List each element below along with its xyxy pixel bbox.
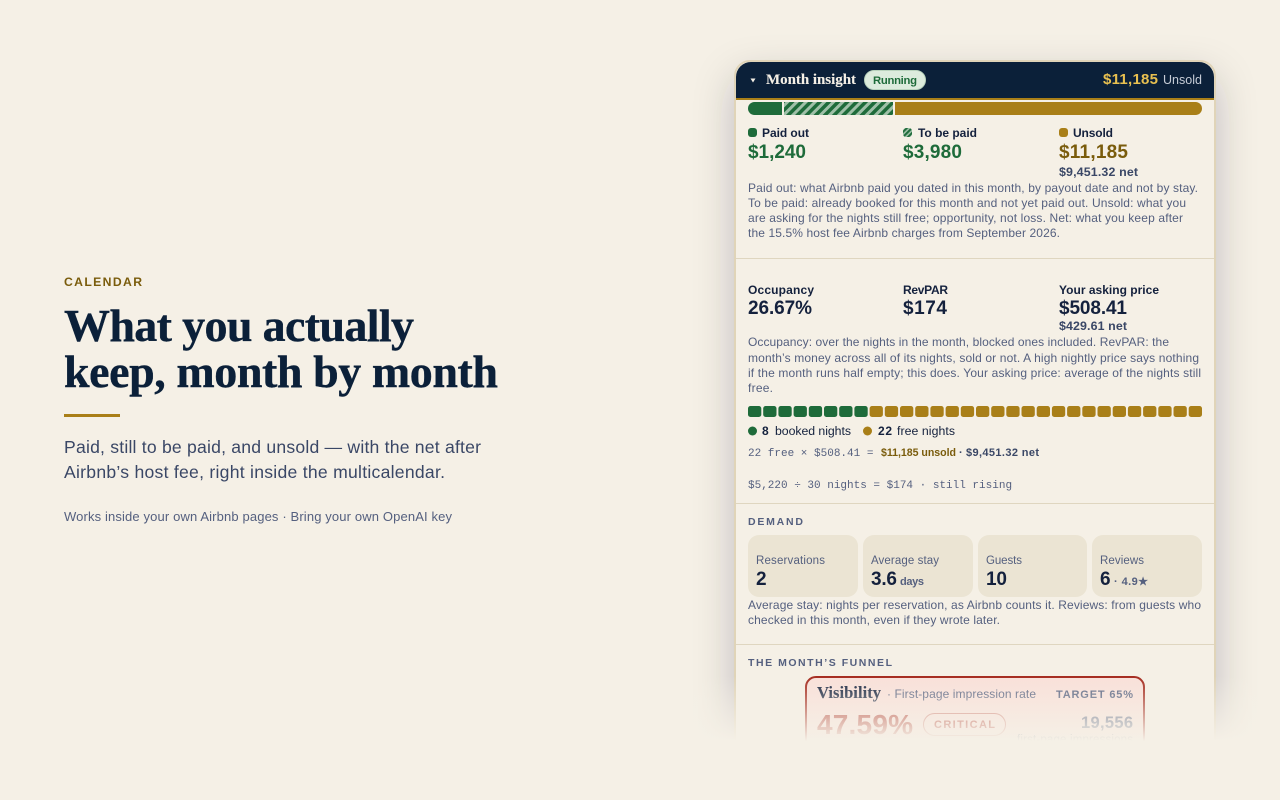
demand card: average stay: 3.6 bbox=[871, 569, 897, 590]
formula: unsold calculation: 22 free × $508.41 = bbox=[748, 448, 873, 460]
metric: revpar: RevPAR bbox=[903, 283, 948, 297]
accent rule bbox=[64, 414, 120, 417]
explanation: money definitions: the 15.5% host fee Airbnb charges from September 2026. bbox=[748, 226, 1060, 240]
demand card: reservations: 2 bbox=[756, 569, 767, 590]
nights legend: free nights bbox=[897, 424, 955, 438]
nights legend: 22 bbox=[878, 424, 892, 438]
nights strip: 8 booked, 22 free bbox=[748, 406, 1202, 417]
title bbox=[64, 300, 498, 397]
metric: paid out: $1,240 bbox=[748, 142, 806, 163]
metric: unsold: Unsold bbox=[1073, 126, 1113, 140]
nights legend: booked nights bbox=[775, 424, 851, 438]
funnel card: visibility: first-page impressions bbox=[1017, 734, 1133, 746]
metric: asking price: $429.61 net bbox=[1059, 319, 1127, 333]
metric: paid out bbox=[748, 126, 809, 163]
explanation: rate definitions: if the month runs half empty; this does. Your asking price: average of the nights still bbox=[748, 366, 1201, 380]
explanation: rate definitions: Occupancy: over the nights in the month, blocked ones included. RevPAR: the bbox=[748, 335, 1169, 349]
metric: to be paid: To be paid bbox=[918, 126, 977, 140]
severity pill: CRITICAL bbox=[934, 719, 995, 731]
formula: unsold calculation: $11,185 unsold bbox=[881, 447, 956, 459]
explanation: money definitions: Paid out: what Airbnb paid you dated in this month, by payout date and not by stay. bbox=[748, 181, 1198, 195]
severity pill bbox=[924, 714, 1006, 736]
demand card: average stay: Average stay bbox=[871, 555, 939, 567]
demand card: reviews bbox=[1092, 535, 1202, 597]
metric: to be paid bbox=[903, 126, 977, 163]
revenue stacked bar bbox=[748, 102, 1202, 115]
card background bbox=[735, 61, 1215, 800]
funnel card: visibility: TARGET 65% bbox=[1056, 689, 1133, 701]
icon: collapse caret bbox=[750, 78, 756, 82]
demand card: reviews: · 4.9★ bbox=[1114, 576, 1148, 588]
panel: month insight card bbox=[735, 61, 1215, 800]
formula: unsold calculation bbox=[748, 447, 1039, 460]
demand card: guests bbox=[978, 535, 1087, 597]
status pill: Running bbox=[873, 75, 917, 87]
metric: to be paid: $3,980 bbox=[903, 142, 962, 163]
nights legend: 8 bbox=[762, 424, 769, 438]
explanation: rate definitions: free. bbox=[748, 381, 773, 395]
subtitle bbox=[64, 437, 481, 482]
explanation: demand definitions: checked in this month, even if they wrote later. bbox=[748, 613, 1000, 627]
metric: paid out: Paid out bbox=[762, 126, 809, 140]
metric: asking price: Your asking price bbox=[1059, 283, 1159, 297]
nights legend bbox=[748, 424, 955, 438]
metric: unsold: $11,185 bbox=[1059, 142, 1128, 163]
metric: asking price bbox=[1059, 283, 1159, 333]
metric: unsold bbox=[1059, 126, 1138, 179]
explanation: money definitions bbox=[748, 181, 1198, 240]
explanation: demand definitions bbox=[748, 598, 1201, 627]
metric: revpar: $174 bbox=[903, 298, 947, 319]
metric: revpar bbox=[903, 283, 948, 319]
demand card: guests: 10 bbox=[986, 569, 1007, 590]
card header bbox=[736, 62, 1214, 100]
formula: unsold calculation: · bbox=[959, 447, 963, 459]
status pill bbox=[864, 70, 926, 90]
demand card: reservations bbox=[748, 535, 858, 597]
header total: Unsold bbox=[1163, 73, 1202, 87]
explanation: rate definitions bbox=[748, 335, 1201, 395]
funnel card: visibility: · First-page impression rate bbox=[887, 687, 1036, 701]
demand card: reservations: Reservations bbox=[756, 555, 825, 567]
metric: occupancy: Occupancy bbox=[748, 283, 814, 297]
metric: asking price: $508.41 bbox=[1059, 298, 1127, 319]
funnel card: visibility: Visibility bbox=[817, 683, 882, 702]
heading: the month's funnel: THE MONTH’S FUNNEL bbox=[748, 657, 893, 669]
metric: occupancy: 26.67% bbox=[748, 298, 812, 319]
footnote: Works inside your own Airbnb pages · Bring your own OpenAI key bbox=[64, 509, 452, 524]
metric: unsold: $9,451.32 net bbox=[1059, 165, 1138, 179]
bottom fade bbox=[660, 676, 1280, 800]
header total: $11,185 bbox=[1103, 71, 1158, 88]
demand card: average stay bbox=[863, 535, 973, 597]
explanation: money definitions: are asking for the nights still free; opportunity, not loss. Net: what you keep after bbox=[748, 211, 1183, 225]
header total bbox=[1103, 71, 1202, 88]
funnel card: visibility: 19,556 bbox=[1081, 714, 1133, 732]
title: What you actually bbox=[64, 300, 414, 351]
explanation: money definitions: To be paid: already booked for this month and not yet paid out. Unsold: what you bbox=[748, 196, 1186, 210]
explanation: demand definitions: Average stay: nights per reservation, as Airbnb counts it. Reviews: from guests who bbox=[748, 598, 1201, 612]
demand card: average stay: days bbox=[900, 576, 924, 588]
funnel card: visibility bbox=[806, 677, 1144, 797]
eyebrow: calendar: CALENDAR bbox=[64, 275, 142, 289]
header title: Month insight bbox=[766, 72, 856, 88]
funnel card: visibility: 47.59% bbox=[817, 709, 913, 740]
formula: revpar calculation: $5,220 ÷ 30 nights = $174 · still rising bbox=[748, 480, 1012, 492]
heading: demand: DEMAND bbox=[748, 516, 803, 528]
subtitle: Airbnb’s host fee, right inside the multicalendar. bbox=[64, 462, 445, 482]
subtitle: Paid, still to be paid, and unsold — with the net after bbox=[64, 437, 481, 457]
demand card: reviews: Reviews bbox=[1100, 555, 1144, 567]
formula: unsold calculation: $9,451.32 net bbox=[966, 447, 1039, 459]
metric: occupancy bbox=[748, 283, 814, 319]
demand card: guests: Guests bbox=[986, 555, 1022, 567]
title: keep, month by month bbox=[64, 346, 498, 397]
demand card: reviews: 6 bbox=[1100, 569, 1111, 590]
explanation: rate definitions: month’s money across all of its nights, sold or not. A high nightly price says nothing bbox=[748, 351, 1199, 365]
